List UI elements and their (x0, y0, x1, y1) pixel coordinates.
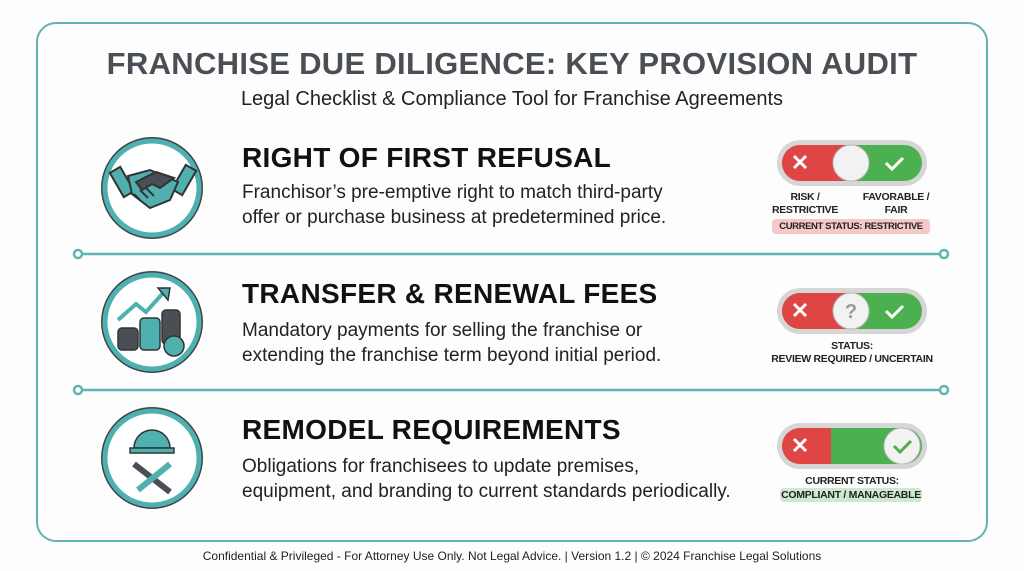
toggle 2 (777, 288, 927, 334)
heading 1: RIGHT OF FIRST REFUSAL (242, 142, 611, 173)
icon: helmet tools (101, 407, 203, 509)
toggle 2: ? (845, 301, 857, 323)
desc 2 (242, 320, 661, 366)
title: FRANCHISE DUE DILIGENCE: KEY PROVISION AUDIT (107, 46, 917, 81)
status 2: STATUS: (831, 340, 873, 352)
heading 2: TRANSFER & RENEWAL FEES (242, 278, 658, 309)
icon: handshake (101, 137, 203, 239)
subtitle: Legal Checklist & Compliance Tool for Franchise Agreements (241, 88, 783, 110)
status 3: CURRENT STATUS: (805, 475, 899, 487)
status 1 (772, 219, 930, 234)
text: FAVORABLE / (863, 191, 929, 203)
desc 3: equipment, and branding to current standards periodically. (242, 481, 731, 502)
heading 3: REMODEL REQUIREMENTS (242, 414, 621, 445)
desc 1 (242, 182, 666, 228)
status 1: CURRENT STATUS: RESTRICTIVE (779, 221, 923, 232)
desc 1: offer or purchase business at predetermined price. (242, 207, 666, 228)
desc 2: Mandatory payments for selling the franchise or (242, 320, 642, 341)
desc 3: Obligations for franchisees to update premises, (242, 456, 639, 477)
toggle 3 (777, 423, 927, 469)
labels 1 (772, 191, 838, 216)
toggle 1 (777, 140, 927, 186)
text: COMPLIANT / MANAGEABLE (781, 489, 921, 501)
labels 1: RISK / (790, 191, 820, 203)
status 2 (771, 340, 933, 365)
text: FAIR (885, 204, 907, 216)
icon: coins (101, 271, 203, 373)
desc 1: Franchisor’s pre-emptive right to match third-party (242, 182, 663, 203)
labels 1: RESTRICTIVE (772, 204, 838, 216)
desc 2: extending the franchise term beyond initial period. (242, 345, 661, 366)
status 2: REVIEW REQUIRED / UNCERTAIN (771, 353, 933, 365)
desc 3 (242, 456, 731, 502)
footer: Confidential & Privileged - For Attorney Use Only. Not Legal Advice. | Version 1.2 | © 2024 Franchise Legal Solutions (203, 549, 821, 563)
